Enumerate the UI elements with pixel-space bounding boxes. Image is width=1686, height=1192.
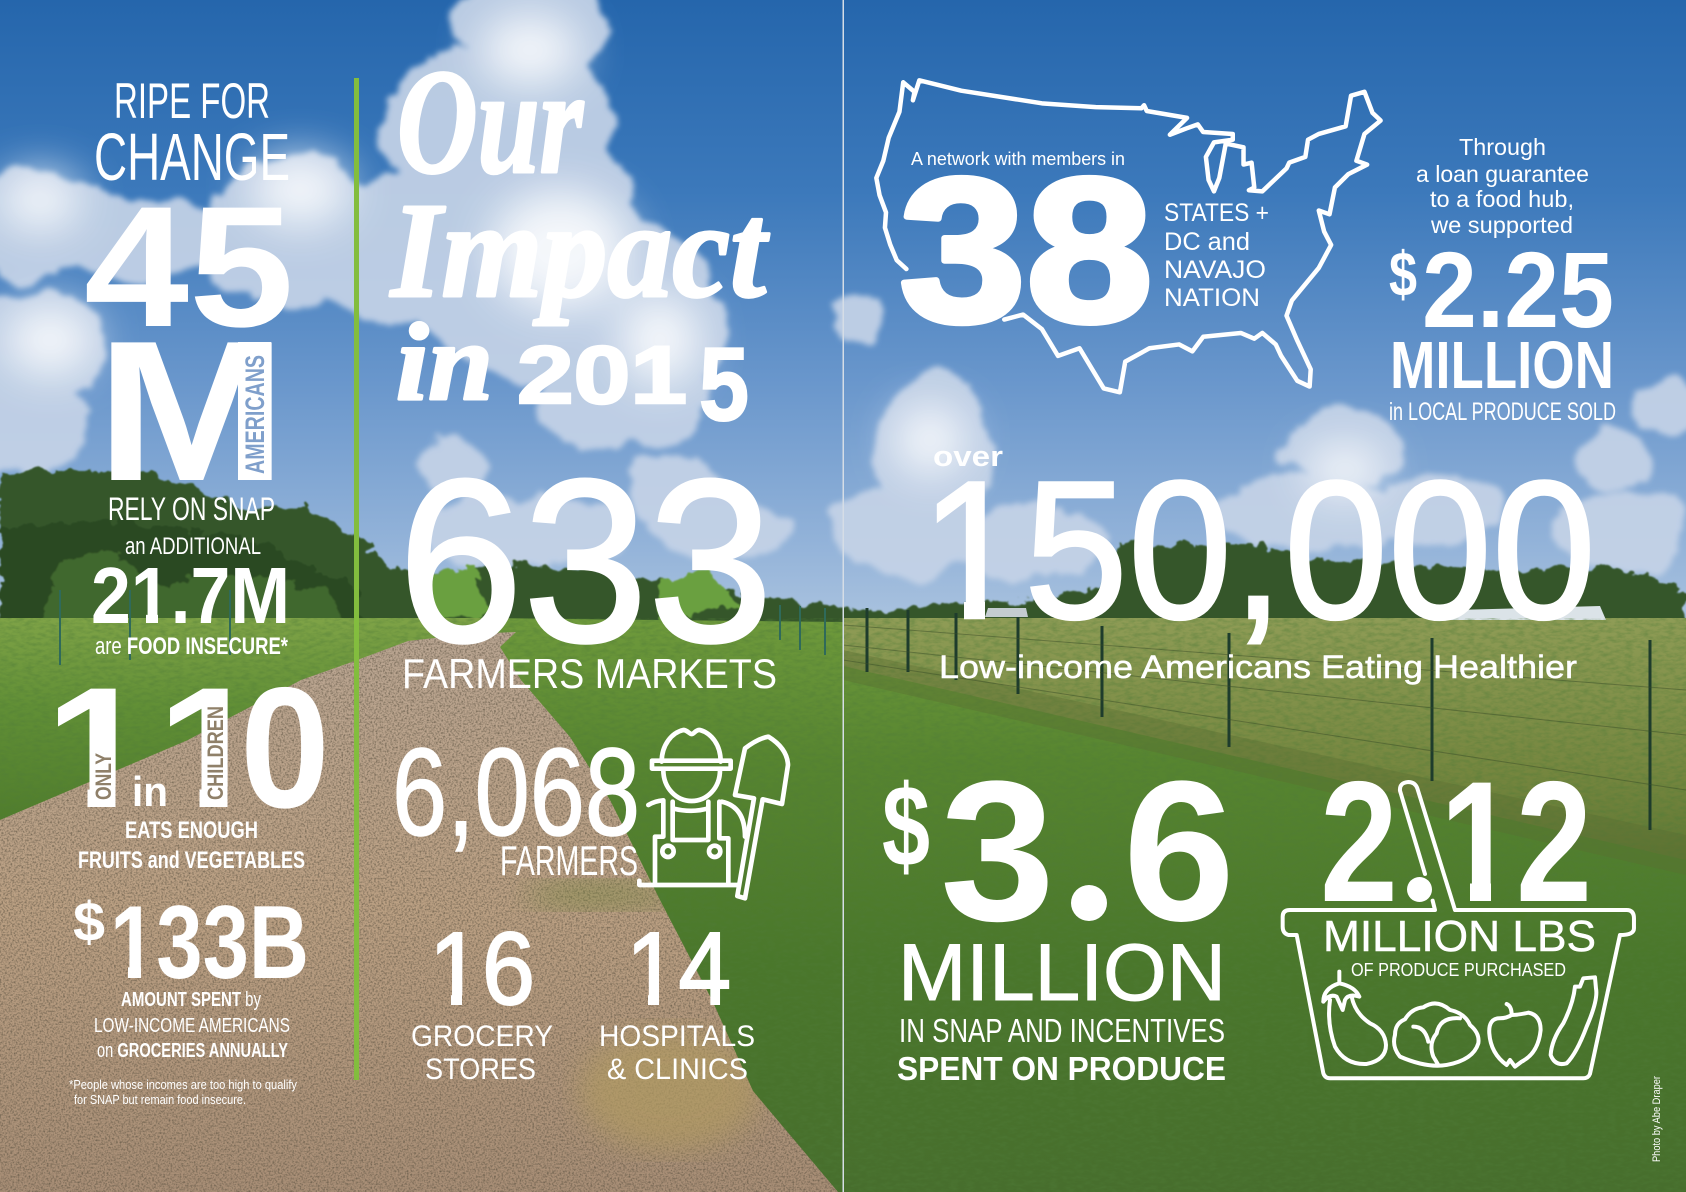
- stat: 1 in 10 children: 1: [45, 652, 151, 844]
- text: amount spent on groceries: AMOUNT SPENT by: [121, 989, 261, 1011]
- stat: $3.6 million spent on produce: [882, 740, 1235, 1087]
- footnote: [69, 1077, 297, 1107]
- stat: 16 grocery stores: STORES: [425, 1053, 536, 1086]
- stat: 6,068 farmers: FARMERS: [500, 837, 638, 884]
- stat: 6,068 farmers: 6,068: [392, 724, 640, 862]
- icon: US map outline: [876, 80, 1381, 392]
- stat: $3.6 million spent on produce: SPENT ON PRODUCE: [897, 1050, 1226, 1087]
- icon: eggplant: [1323, 972, 1386, 1064]
- stat: $2.25 million loan guarantee: MILLION: [1390, 328, 1614, 403]
- footnote: *People whose incomes are too high to qualify: [69, 1077, 297, 1092]
- text: eats enough fruits and vegetables: FRUITS and VEGETABLES: [78, 847, 305, 874]
- stat: 2.12 million lbs: OF PRODUCE PURCHASED: [1351, 960, 1566, 980]
- heading: ripe for change: RIPE FOR: [114, 73, 270, 129]
- left grass: [0, 618, 480, 840]
- title: our impact in 2015: 5: [699, 327, 749, 443]
- icon: pepper: [1489, 1004, 1541, 1067]
- stat: $133B: 133B: [110, 885, 309, 1001]
- stat: 1 in 10 children: 0: [240, 652, 330, 844]
- text: rely on SNAP: RELY ON SNAP: [108, 491, 275, 527]
- right grass of the road and bright grass slope: [480, 618, 1686, 1192]
- stat: 16 grocery stores: [412, 931, 552, 1080]
- text: an additional: an ADDITIONAL: [125, 533, 261, 560]
- stat: $2.25 million loan guarantee: $: [1389, 240, 1417, 310]
- stat: 2.12 million lbs: 12: [1440, 746, 1592, 938]
- stat: 150,000 low-income Americans: Low-income Americans Eating Healthier: [939, 649, 1577, 685]
- footnote: for SNAP but remain food insecure.: [74, 1092, 246, 1107]
- stat: 38 states: STATES +: [1164, 199, 1269, 227]
- stat: 1 in 10 children: 1: [157, 652, 263, 844]
- stat: 1 in 10 children: [58, 686, 324, 809]
- stat: 150,000 low-income Americans: over: [933, 441, 1003, 473]
- stat: 45M Americans: 45: [84, 171, 294, 363]
- stat: 2.12 million lbs: 2: [1320, 746, 1398, 938]
- distant field: [843, 618, 1686, 878]
- page divider: [842, 0, 844, 1192]
- stat: 2.12 million lbs: MILLION LBS: [1323, 912, 1596, 961]
- green divider bar: [354, 78, 359, 1080]
- title: our impact in 2015: Impact: [389, 176, 770, 326]
- stat: $133B: [74, 900, 306, 979]
- stat: 2.12 million lbs: [1324, 780, 1594, 976]
- stat: 21.7M: 21.7M: [91, 551, 290, 640]
- stat: 45M Americans: M: [96, 300, 287, 523]
- hoop houses: [1450, 606, 1606, 620]
- stat: 633 farmers markets: FARMERS MARKETS: [402, 650, 777, 697]
- text: amount spent on groceries: on GROCERIES ANNUALLY: [97, 1040, 288, 1062]
- road: [0, 620, 860, 1192]
- stat: 38 states: [899, 136, 1269, 365]
- title: our impact in 2015: Our: [397, 39, 584, 205]
- photo credit: Photo by Abe Draper: [1651, 1076, 1663, 1162]
- stat: 38 states: DC and: [1164, 228, 1250, 256]
- stat: 38 states: A network with members in: [911, 149, 1125, 169]
- icon: zucchini: [1551, 977, 1596, 1064]
- text: amount spent on groceries: LOW-INCOME AMERICANS: [94, 1015, 290, 1037]
- heading: ripe for change: [94, 73, 290, 195]
- stat: 38 states: NAVAJO: [1164, 256, 1266, 284]
- text: eats enough fruits and vegetables: [78, 817, 305, 874]
- stat: 38 states: 38: [899, 136, 1153, 365]
- stat: $3.6 million spent on produce: 6: [1123, 740, 1235, 963]
- stat: $2.25 million loan guarantee: we supported: [1430, 212, 1573, 238]
- heading: ripe for change: CHANGE: [94, 120, 290, 195]
- stat: 633 farmers markets: 633: [398, 432, 773, 691]
- stat: $2.25 million loan guarantee: Through: [1459, 134, 1546, 160]
- stat: 14 hospitals and clinics: 14: [626, 911, 731, 1026]
- stat: $3.6 million spent on produce: MILLION: [898, 928, 1226, 1018]
- stat: 1 in 10 children: ONLY: [91, 753, 116, 800]
- stat: $133B: $: [73, 890, 105, 953]
- stat: 150,000 low-income Americans: 150,000: [920, 440, 1596, 660]
- stat: 16 grocery stores: GROCERY: [411, 1020, 553, 1053]
- stat: 38 states: NATION: [1164, 284, 1260, 312]
- stat: 14 hospitals and clinics: [601, 932, 754, 1080]
- stat: $2.25 million loan guarantee: 2.25: [1422, 229, 1614, 350]
- stat: $2.25 million loan guarantee: to a food hub,: [1430, 186, 1574, 212]
- stat: 1 in 10 children: CHILDREN: [203, 706, 228, 800]
- icon: farmer with shovel: [639, 730, 788, 898]
- panel: network and results: [876, 80, 1663, 1162]
- text: are food insecure: are FOOD INSECURE*: [95, 633, 289, 660]
- stat: $3.6 million spent on produce: 3: [940, 740, 1055, 963]
- title: our impact in 2015: 201: [517, 330, 687, 421]
- stat: $3.6 million spent on produce: $: [882, 761, 930, 891]
- title: our impact in 2015: in: [396, 301, 493, 423]
- stat: $2.25 million loan guarantee: a loan guarantee: [1416, 161, 1589, 187]
- stat: 45M Americans: AMERICANS: [240, 355, 270, 474]
- stat: $3.6 million spent on produce: .: [1085, 873, 1096, 917]
- tree line: [0, 468, 1686, 640]
- stat: 14 hospitals and clinics: & CLINICS: [607, 1053, 748, 1086]
- title: our impact in 2015: [389, 39, 770, 443]
- panel: our impact: [389, 39, 788, 1086]
- stat: 1 in 10 children: in: [132, 768, 168, 815]
- stat: $3.6 million spent on produce: IN SNAP AND INCENTIVES: [899, 1012, 1225, 1049]
- fence: [60, 590, 1686, 830]
- stat: $2.25 million loan guarantee: [1389, 134, 1616, 426]
- text: eats enough fruits and vegetables: EATS ENOUGH: [125, 817, 258, 844]
- icon: lettuce: [1394, 1003, 1479, 1066]
- text: amount spent on groceries: [94, 989, 290, 1062]
- stat: 45M Americans: [84, 171, 294, 523]
- stat: 2.12 million lbs: .: [1415, 861, 1426, 905]
- panel: ripe for change: [45, 73, 330, 1107]
- stat: 14 hospitals and clinics: HOSPITALS: [599, 1020, 755, 1053]
- icon: basket with vegetables: [1283, 782, 1634, 1078]
- stat: 16 grocery stores: 16: [429, 911, 535, 1026]
